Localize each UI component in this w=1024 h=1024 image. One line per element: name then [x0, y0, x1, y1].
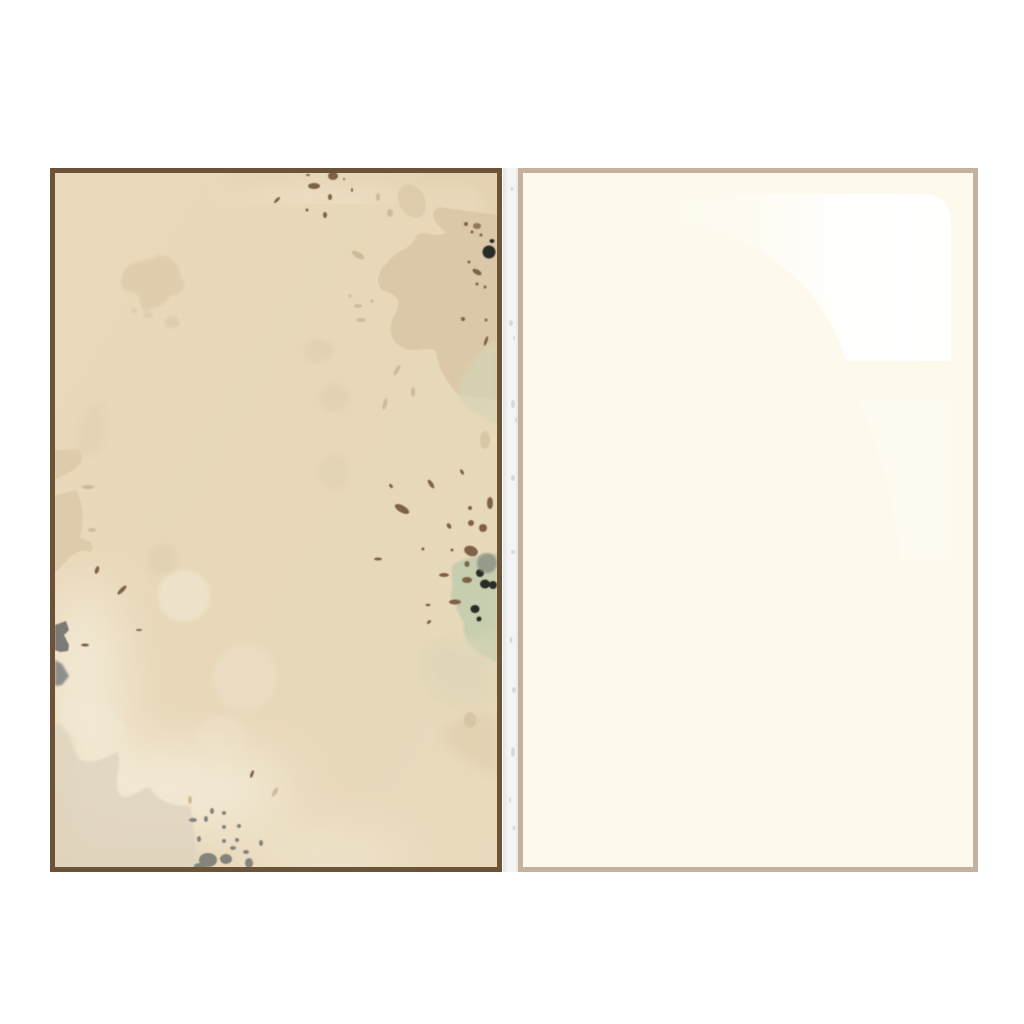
warm edge shading — [488, 176, 493, 185]
stain: grey wash bottom left — [55, 724, 200, 867]
tan droplets — [82, 193, 490, 804]
panel: stained parchment page — [45, 164, 500, 871]
glare: upper right rounded highlight — [610, 194, 951, 361]
stain: sage green blot lower right — [450, 553, 497, 662]
stain: large tan blot upper right — [378, 179, 497, 400]
brown splatter — [81, 172, 493, 778]
grey ink patches left edge — [55, 621, 69, 652]
stain: green wash right — [460, 346, 497, 423]
panel: cream blank page — [520, 170, 976, 870]
grey splatter bottom — [189, 808, 263, 869]
pale washed corner: top right — [230, 164, 410, 200]
light bokeh spots — [158, 570, 210, 622]
glare: lower highlight strip — [858, 398, 951, 560]
stain: tan blots left edge — [55, 449, 93, 572]
spine strip between pages — [503, 168, 518, 872]
pale washed area: lower left — [55, 584, 374, 867]
faint blots centre — [147, 339, 350, 576]
grey patch behind ink at right edge — [477, 553, 497, 573]
stain: pale blot upper left — [121, 255, 185, 328]
dark ink blots — [470, 239, 497, 622]
